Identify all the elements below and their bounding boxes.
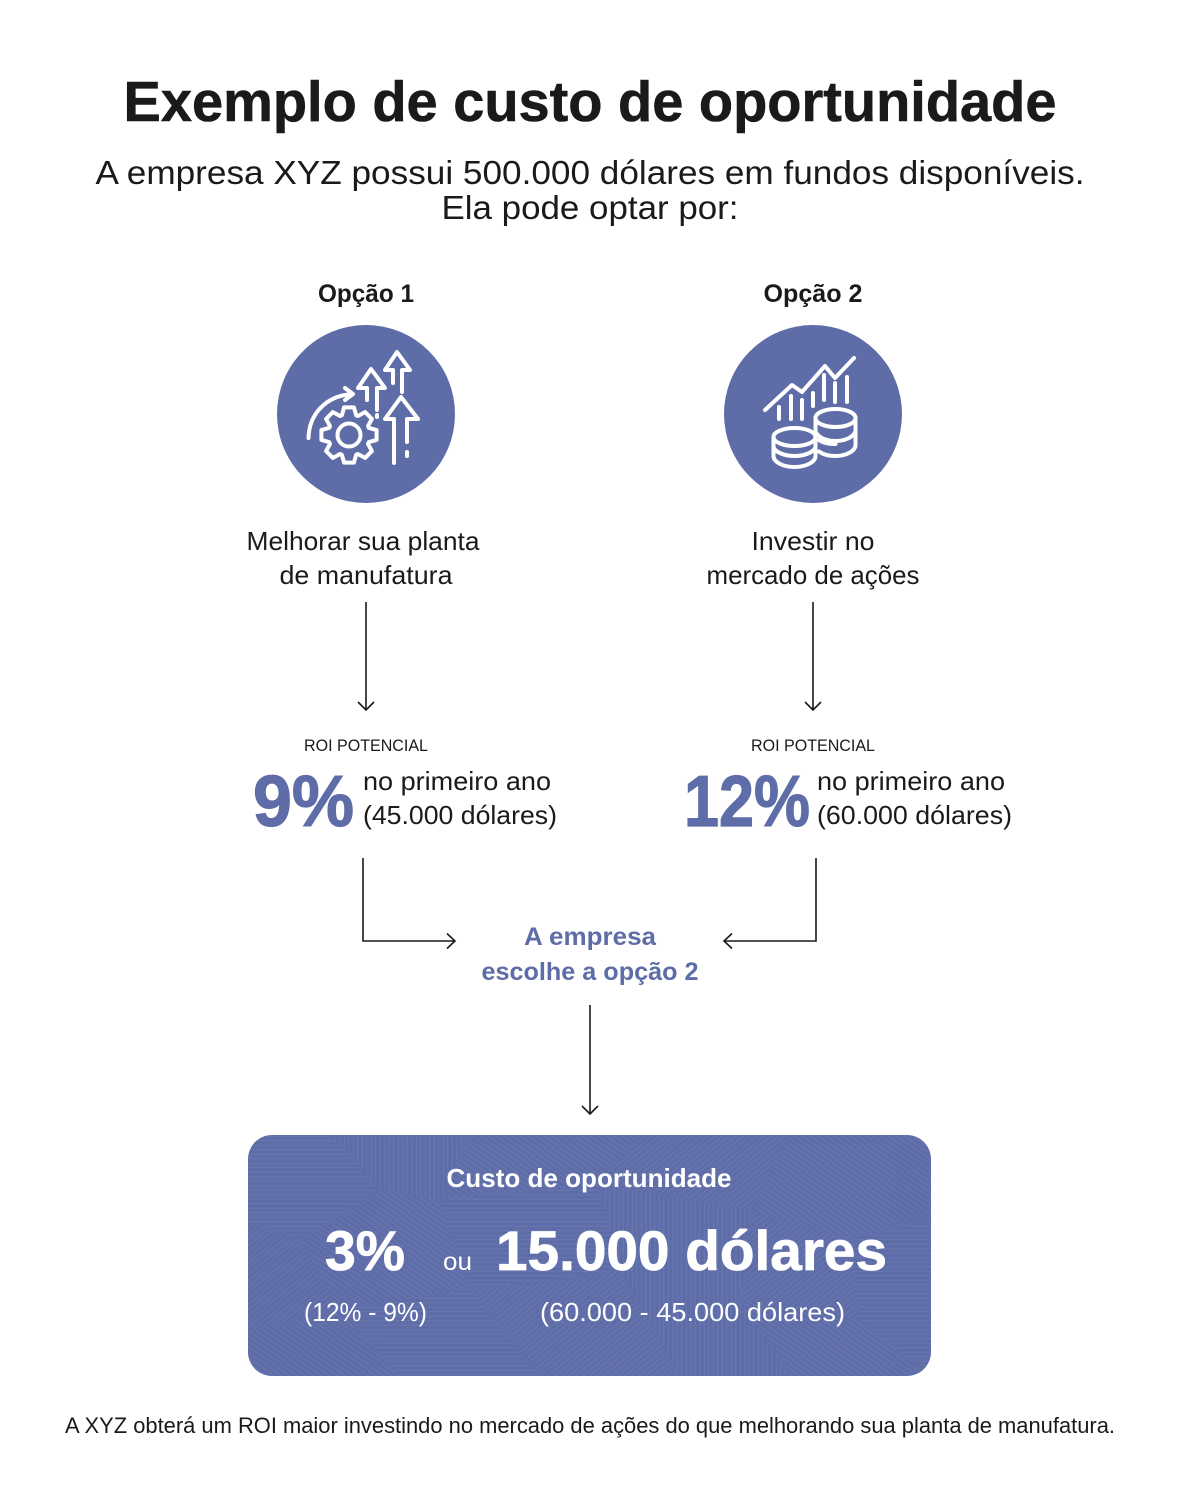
arrow: option 1 to decision (363, 858, 455, 948)
ROI detail 2: no primeiro ano (817, 766, 1005, 796)
connector word: ou (443, 1248, 472, 1276)
arrow: decision to result (582, 1005, 598, 1114)
arrow: option 2 down (805, 602, 821, 710)
value: dollars: 15.000 dólares (496, 1219, 887, 1282)
ROI detail 1 (363, 766, 557, 830)
decision text: A empresa (524, 923, 657, 951)
option 1 description (246, 526, 480, 590)
ROI label 1: ROI POTENCIAL (304, 736, 428, 755)
option 2 description: mercado de ações (706, 560, 920, 590)
subtitle: A empresa XYZ possui 500.000 dólares em fundos disponíveis. (96, 154, 1084, 191)
ROI detail 2 (817, 766, 1012, 830)
option 2 description: Investir no (752, 526, 874, 556)
value: percent: 3% (325, 1219, 405, 1282)
arrow: option 2 to decision (724, 858, 816, 948)
percent formula: (12% - 9%) (304, 1297, 427, 1327)
ROI detail 1: no primeiro ano (363, 766, 551, 796)
option 1 description: de manufatura (280, 560, 453, 590)
panel: opportunity cost (248, 1135, 931, 1376)
panel heading: Custo de oportunidade (446, 1163, 732, 1193)
ROI value 2: 12% (684, 762, 810, 842)
icon: gear with rising arrows (277, 325, 455, 503)
option 2 heading: Opção 2 (764, 280, 862, 308)
ROI detail 2: (60.000 dólares) (817, 800, 1012, 830)
option 1 heading: Opção 1 (318, 280, 414, 308)
decision text (482, 923, 698, 986)
dollar formula: (60.000 - 45.000 dólares) (540, 1297, 845, 1327)
option 1 description: Melhorar sua planta (246, 526, 480, 556)
ROI label 2: ROI POTENCIAL (751, 736, 875, 755)
panel: option 1 (246, 280, 557, 842)
ROI value 1: 9% (253, 762, 354, 842)
arrow: option 1 down (358, 602, 374, 710)
panel: option 2 (684, 280, 1012, 842)
subtitle: Ela pode optar por: (442, 189, 738, 226)
icon: coins and growth chart (724, 325, 902, 503)
footnote: A XYZ obterá um ROI maior investindo no mercado de ações do que melhorando sua planta de manufatura. (65, 1413, 1115, 1438)
subtitle (96, 154, 1084, 226)
title: Exemplo de custo de oportunidade (124, 70, 1056, 134)
decision text: escolhe a opção 2 (482, 958, 698, 986)
option 2 description (706, 526, 920, 590)
ROI detail 1: (45.000 dólares) (363, 800, 557, 830)
